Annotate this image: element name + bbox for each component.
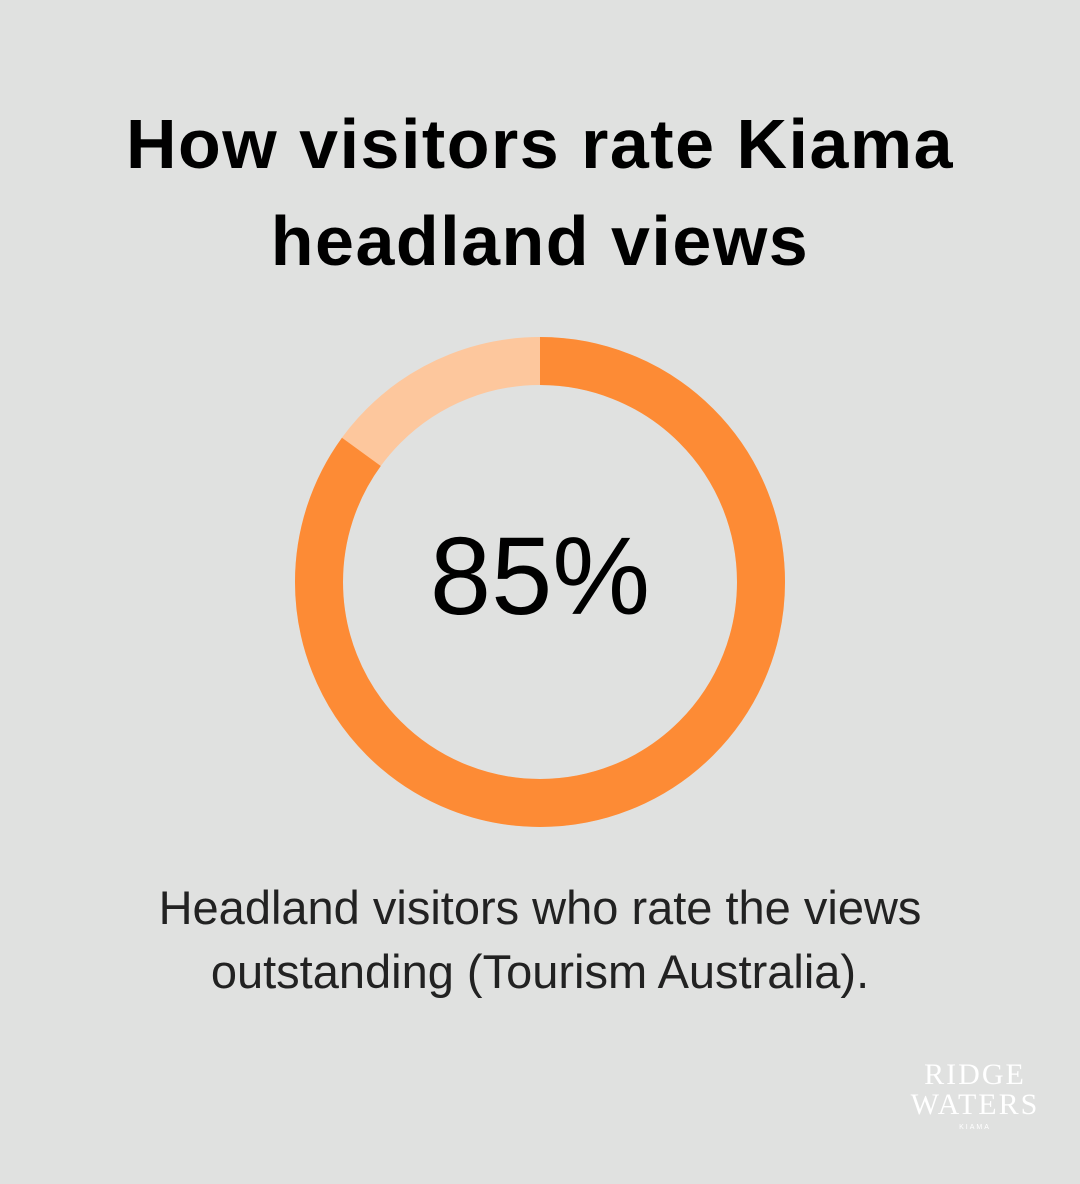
logo: WATERS [911,1088,1039,1121]
caption: outstanding (Tourism Australia). [211,945,869,998]
logo: KIAMA [959,1124,991,1131]
caption: Headland visitors who rate the views [159,881,921,934]
title [126,105,954,280]
title: How visitors rate Kiama [126,105,954,183]
donut chart: 85% [430,515,650,638]
logo: RIDGE [924,1058,1026,1091]
caption [159,881,921,998]
logo [910,1058,1039,1131]
title: headland views [271,202,809,280]
